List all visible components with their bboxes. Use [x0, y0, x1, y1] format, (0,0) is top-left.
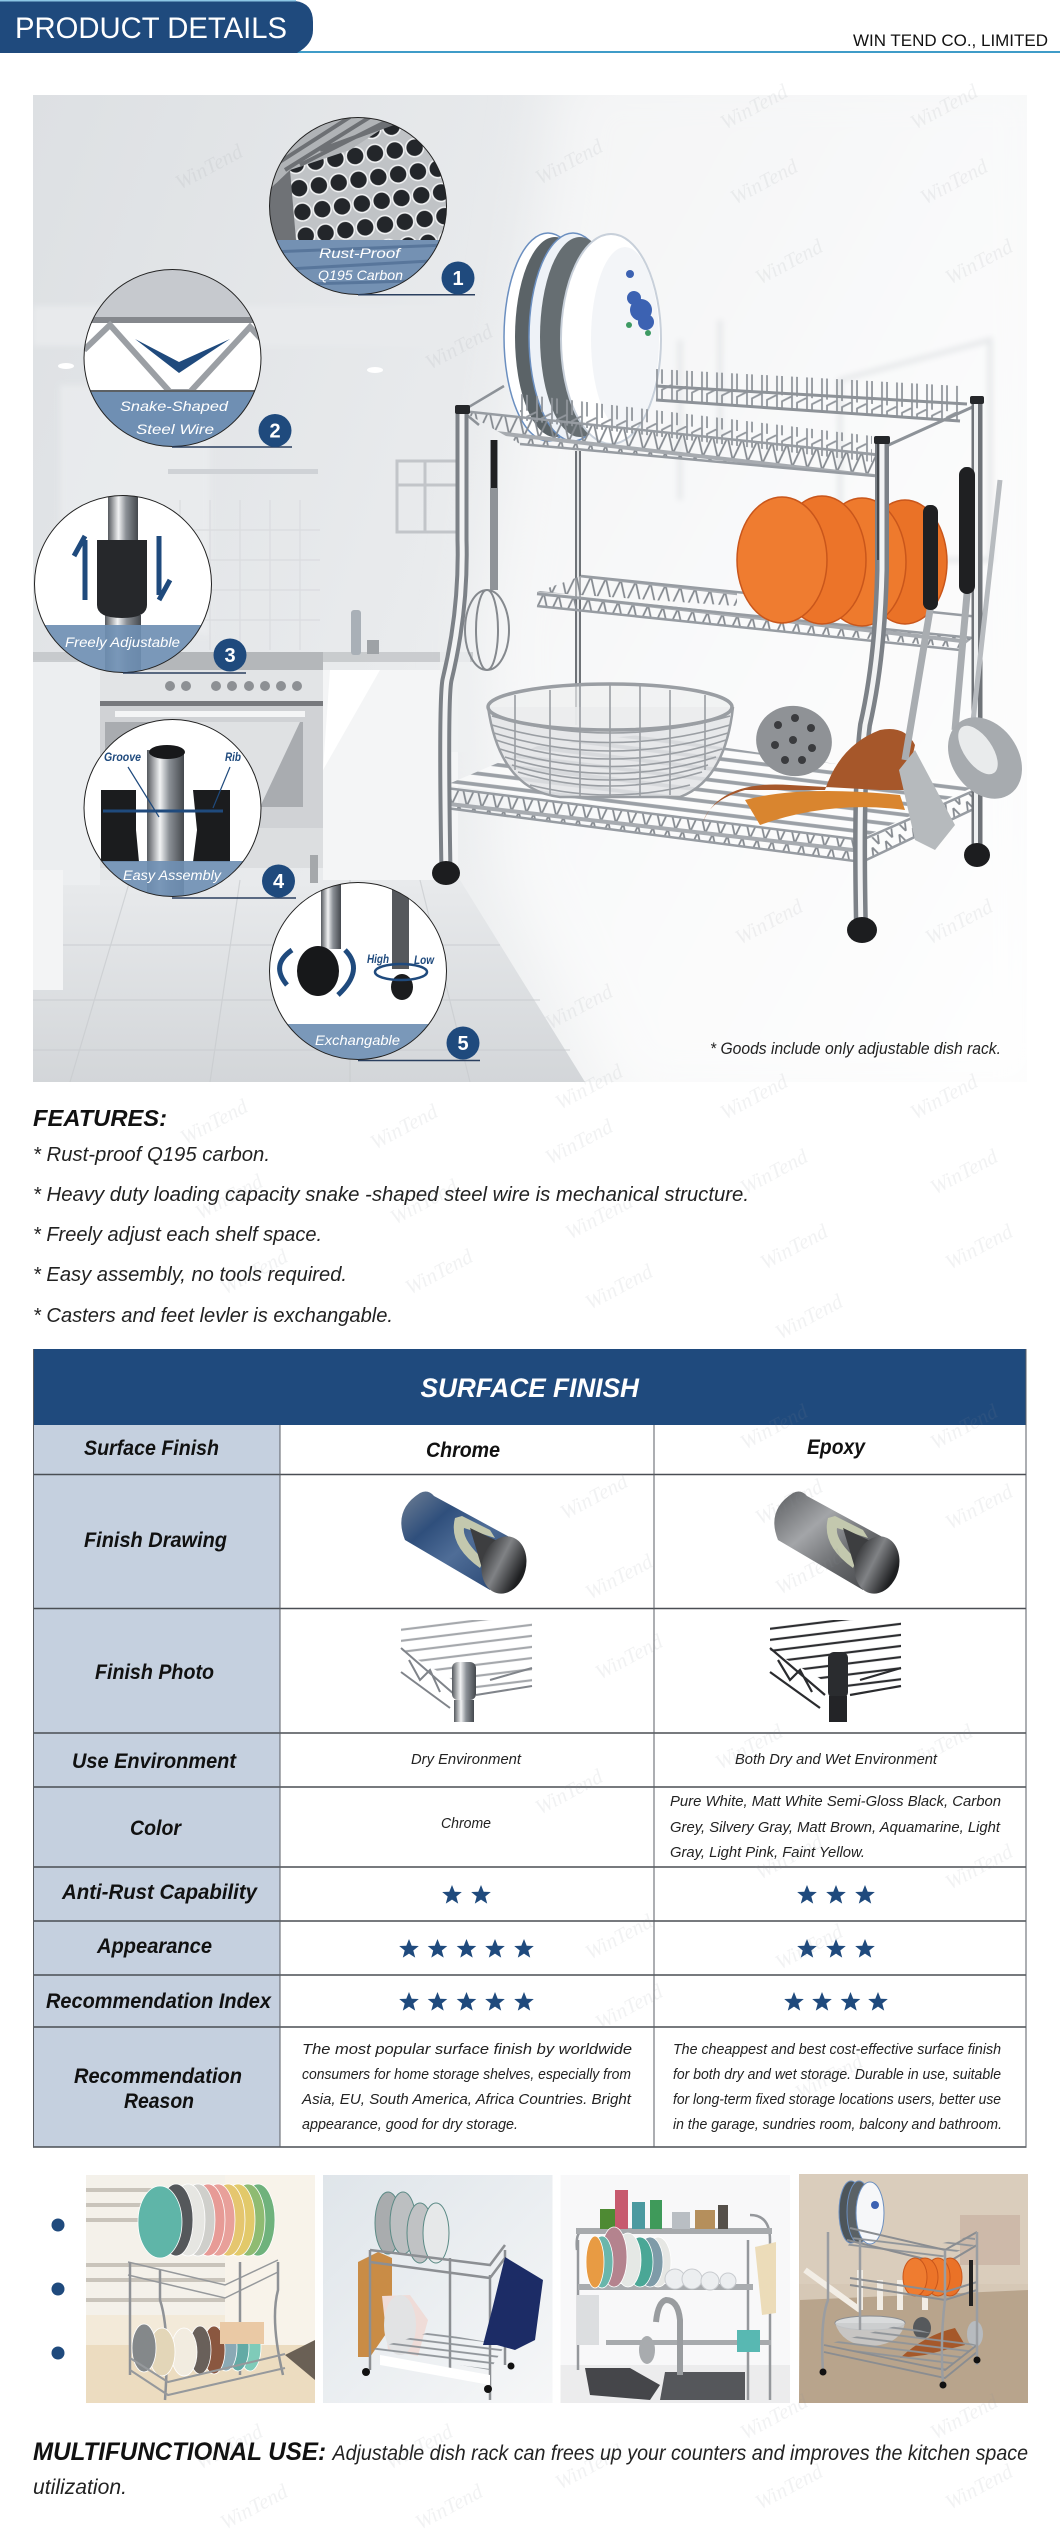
left post: [445, 411, 462, 873]
badge 2: [258, 414, 292, 447]
watermark layer: [171, 79, 1017, 2534]
watermark layer: WinTend: [756, 1219, 832, 1274]
watermark layer: WinTend: [216, 2479, 292, 2534]
callout 5: exchangeable: [269, 881, 480, 1061]
watermark layer: WinTend: [751, 234, 827, 289]
callout 3: freely adjustable: Freely Adjustable: [65, 634, 180, 650]
badge 1: [442, 262, 474, 294]
callout 4: easy assembly: Easy Assembly: [123, 867, 222, 883]
row: surface finish: Chrome: [426, 1439, 500, 1462]
row: anti-rust capability: [61, 1881, 875, 1904]
watermark layer: WinTend: [941, 234, 1017, 289]
row: color: Pure White, Matt White Semi-Gloss Black, Carbon: [670, 1793, 1001, 1810]
large ladle: [933, 703, 1037, 813]
callout 5: exchangeable: Low: [414, 953, 435, 967]
hanging utensils: [899, 467, 1037, 850]
chrome cylinder: [401, 1492, 532, 1598]
wooden spatula: [703, 729, 915, 822]
back dividers: [656, 369, 960, 421]
watermark layer: WinTend: [531, 134, 607, 189]
watermark layer: WinTend: [581, 1259, 657, 1314]
callout 4: easy assembly: [83, 719, 296, 900]
hero kitchen background: [33, 60, 1060, 1110]
features heading: FEATURES:: [33, 1105, 167, 1131]
row: recommendation reason: for both dry and wet storage. Durable in use, suitable: [673, 2066, 1001, 2083]
watermark layer: WinTend: [736, 1399, 812, 1454]
row: recommendation reason: consumers for home storage shelves, especially from: [302, 2066, 631, 2083]
row: color: Chrome: [441, 1815, 491, 1832]
watermark layer: WinTend: [771, 1544, 847, 1599]
row: color: Grey, Silvery Gray, Matt Brown, Aquamarine, Light: [670, 1819, 1001, 1836]
row: recommendation reason: The most popular surface finish by worldwide: [302, 2041, 632, 2058]
watermark layer: WinTend: [901, 1719, 977, 1774]
row: color: Color: [130, 1817, 183, 1840]
row: anti-rust capability: Anti-Rust Capability: [61, 1881, 258, 1904]
watermark layer: WinTend: [381, 2419, 457, 2474]
watermark layer: WinTend: [386, 1174, 462, 1229]
photo 2: rack with boards and mitt: [323, 2175, 553, 2403]
middle shelf: [537, 576, 980, 650]
watermark layer: WinTend: [921, 894, 997, 949]
wire basket: [488, 684, 733, 797]
top shelf front truss: [462, 411, 875, 476]
bottom shelf: [446, 735, 980, 862]
row: appearance: [96, 1935, 875, 1958]
bullet dots: [52, 2218, 64, 2360]
multifunctional use text: MULTIFUNCTIONAL USE:: [33, 2438, 326, 2466]
watermark layer: WinTend: [366, 1099, 442, 1154]
dish rack: [432, 233, 1037, 943]
watermark layer: WinTend: [916, 154, 992, 209]
watermark layer: WinTend: [906, 1069, 982, 1124]
watermark layer: WinTend: [941, 1479, 1017, 1534]
row: use environment: Dry Environment: [411, 1751, 522, 1768]
row: appearance: Appearance: [96, 1935, 212, 1958]
right post: [972, 402, 982, 855]
callout 1: rust-proof: [269, 117, 475, 296]
watermark layer: WinTend: [191, 2419, 267, 2474]
epoxy shelf photo: [770, 1620, 901, 1722]
panel: hero kitchen photo: [33, 60, 1060, 1110]
big plates: [504, 233, 661, 444]
cleaver: [899, 750, 955, 850]
watermark layer: WinTend: [541, 1114, 617, 1169]
row: color: Gray, Light Pink, Faint Yellow.: [670, 1844, 865, 1861]
features text block: * Easy assembly, no tools required.: [33, 1264, 347, 1286]
front dividers: [520, 394, 872, 462]
photo 1: colored plates rack: [86, 2175, 315, 2403]
watermark layer: WinTend: [581, 1549, 657, 1604]
watermark layer: WinTend: [531, 1764, 607, 1819]
cabinets: [33, 660, 100, 885]
watermark layer: WinTend: [581, 1909, 657, 1964]
callout 1: rust-proof: Q195 Carbon: [318, 267, 403, 283]
watermark layer: WinTend: [551, 2439, 627, 2494]
watermark layer: WinTend: [191, 1169, 267, 1224]
row: recommendation reason: for long-term fixed storage locations users, better use: [673, 2091, 1001, 2108]
badge 5: [446, 1026, 480, 1060]
watermark layer: WinTend: [411, 2479, 487, 2534]
header bar: [0, 0, 1060, 53]
watermark layer: WinTend: [736, 1144, 812, 1199]
badge 3: 3: [224, 645, 236, 667]
watermark layer: WinTend: [551, 1059, 627, 1114]
callout 4: easy assembly: Groove: [104, 750, 141, 764]
watermark layer: WinTend: [726, 154, 802, 209]
row: recommendation reason: appearance, good for dry storage.: [302, 2116, 518, 2133]
watermark layer: WinTend: [716, 79, 792, 134]
watermark layer: WinTend: [751, 1474, 827, 1529]
badge 2: 2: [269, 420, 281, 442]
callout 4: easy assembly: Rib: [225, 750, 241, 764]
front post: [860, 442, 882, 930]
callout 2: snake-shaped wire: [83, 269, 292, 448]
watermark layer: WinTend: [751, 2459, 827, 2514]
rear post: [575, 451, 581, 725]
chrome shelf photo: [401, 1620, 532, 1722]
watermark layer: WinTend: [941, 2459, 1017, 2514]
floor: [33, 901, 585, 1082]
header title: PRODUCT DETAILS: [15, 12, 287, 45]
table header: SURFACE FINISH: [420, 1373, 639, 1403]
bottle: [351, 610, 361, 655]
watermark layer: WinTend: [711, 1719, 787, 1774]
epoxy cylinder: [774, 1492, 905, 1598]
stove: [100, 652, 323, 883]
watermark layer: WinTend: [771, 1919, 847, 1974]
features text block: * Heavy duty loading capacity snake -shaped steel wire is mechanical structure.: [33, 1184, 749, 1206]
watermark layer: WinTend: [771, 1289, 847, 1344]
label column background: [33, 1425, 280, 2147]
table header: [33, 1349, 1026, 1425]
row: surface finish: Epoxy: [807, 1436, 866, 1459]
callout 3: freely adjustable: [34, 495, 246, 675]
photo 3: over-sink rack: [560, 2175, 790, 2403]
watermark layer: WinTend: [421, 319, 497, 374]
row: color: [130, 1793, 1001, 1861]
row: finish drawing: Finish Drawing: [84, 1529, 227, 1552]
watermark layer: WinTend: [926, 2389, 1002, 2444]
callout 5: exchangeable: Exchangable: [315, 1032, 400, 1048]
watermark layer: WinTend: [941, 1219, 1017, 1274]
callout 2: snake-shaped wire: Snake-Shaped: [120, 398, 229, 414]
row: recommendation reason: The cheappest and best cost-effective surface finish: [673, 2041, 1001, 2058]
watermark layer: WinTend: [736, 2389, 812, 2444]
row: finish drawing: [84, 1492, 905, 1598]
callout 2: snake-shaped wire: Steel Wire: [136, 421, 214, 437]
row: surface finish: [84, 1436, 866, 1462]
watermark layer: WinTend: [926, 1399, 1002, 1454]
watermark layer: WinTend: [751, 1829, 827, 1884]
badge 5: 5: [457, 1033, 469, 1055]
row: use environment: Both Dry and Wet Environment: [735, 1751, 938, 1768]
skimmer: [750, 699, 838, 783]
multifunctional use text: Adjustable dish rack can frees up your counters and improves the kitchen space: [331, 2442, 1028, 2465]
row: finish photo: Finish Photo: [95, 1661, 214, 1684]
watermark layer: WinTend: [906, 79, 982, 134]
watermark layer: WinTend: [216, 1244, 292, 1299]
badge 4: 4: [273, 871, 285, 893]
watermark layer: WinTend: [176, 1094, 252, 1149]
multifunctional use text: utilization.: [33, 2476, 127, 2499]
features text block: [33, 1105, 749, 1327]
watermark layer: WinTend: [731, 894, 807, 949]
row: use environment: Use Environment: [72, 1750, 237, 1773]
watermark layer: WinTend: [791, 2049, 867, 2104]
features text block: * Rust-proof Q195 carbon.: [33, 1144, 270, 1166]
whisk: [465, 440, 509, 670]
company name: WIN TEND CO., LIMITED: [853, 31, 1048, 50]
watermark layer: WinTend: [561, 1189, 637, 1244]
row: recommendation reason: Reason: [124, 2090, 194, 2113]
badge 1: 1: [452, 268, 464, 290]
footnote: * Goods include only adjustable dish rack.: [710, 1039, 1001, 1058]
badge 3: [214, 638, 246, 672]
badge 4: [262, 864, 295, 898]
watermark layer: WinTend: [401, 1244, 477, 1299]
watermark layer: WinTend: [591, 1979, 667, 2034]
watermark layer: WinTend: [926, 1144, 1002, 1199]
multifunctional use text: [33, 2438, 1028, 2499]
row: surface finish: Surface Finish: [84, 1437, 219, 1460]
watermark layer: WinTend: [941, 1839, 1017, 1894]
panel: surface finish table: [33, 1349, 1026, 2147]
row: recommendation reason: Recommendation: [74, 2065, 242, 2088]
watermark layer: WinTend: [716, 1069, 792, 1124]
watermark layer: WinTend: [541, 979, 617, 1034]
features text block: * Freely adjust each shelf space.: [33, 1224, 322, 1246]
photo 4: rack on wooden table: [799, 2174, 1028, 2403]
row: finish photo: [95, 1620, 901, 1722]
watermark layer: WinTend: [171, 139, 247, 194]
callout 1: rust-proof: Rust-Proof: [319, 245, 403, 261]
row: recommendation index: Recommendation Index: [46, 1990, 272, 2013]
row: recommendation index: [46, 1990, 888, 2013]
watermark layer: WinTend: [556, 1469, 632, 1524]
row: recommendation reason: Asia, EU, South America, Africa Countries. Bright: [301, 2091, 632, 2108]
watermark layer: WinTend: [591, 1629, 667, 1684]
features text block: * Casters and feet levler is exchangable.: [33, 1305, 393, 1327]
orange plates: [737, 496, 947, 626]
callout 5: exchangeable: High: [367, 952, 389, 966]
row: recommendation reason: [74, 2041, 1002, 2133]
row: recommendation reason: in the garage, sundries room, balcony and bathroom.: [673, 2116, 1002, 2133]
row: use environment: [72, 1750, 938, 1773]
